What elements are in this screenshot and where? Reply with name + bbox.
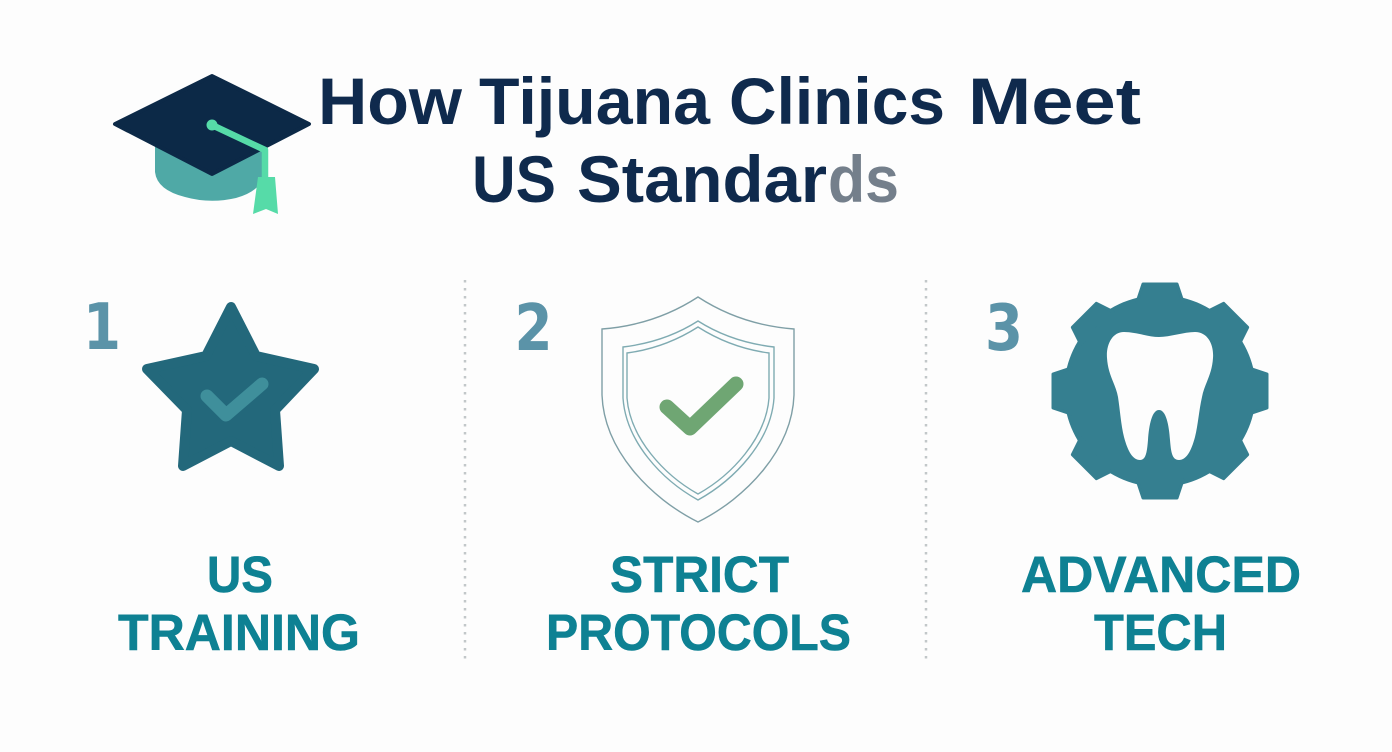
number 3: 3	[985, 292, 1023, 366]
panel: US training	[83, 291, 360, 661]
label: US Training	[118, 546, 360, 661]
title: Clinics	[729, 64, 945, 138]
label: Strict Protocols: STRICT	[610, 546, 789, 603]
label: Strict Protocols	[546, 546, 851, 661]
number 1: 1	[83, 291, 121, 365]
panel: strict protocols	[514, 292, 851, 661]
panel: advanced tech	[985, 284, 1301, 661]
title: Tijuana	[479, 64, 711, 138]
title: ds	[828, 142, 899, 216]
title: Standar	[577, 142, 827, 216]
number 2: 2	[514, 292, 552, 366]
label: Strict Protocols: PROTOCOLS	[546, 604, 851, 661]
icon: graduation cap	[115, 76, 309, 214]
label: Advanced Tech	[1021, 546, 1301, 661]
title: How	[318, 64, 463, 138]
title: Meet	[968, 64, 1141, 138]
label: Advanced Tech: TECH	[1094, 604, 1227, 661]
icon: gear with tooth	[1053, 284, 1267, 498]
title	[318, 64, 1141, 216]
title: US	[472, 142, 556, 216]
label: US Training: TRAINING	[118, 604, 360, 661]
icon: star with check	[147, 307, 314, 466]
label: Advanced Tech: ADVANCED	[1021, 546, 1301, 603]
icon: shield with check	[602, 297, 794, 522]
label: US Training: US	[207, 546, 273, 603]
